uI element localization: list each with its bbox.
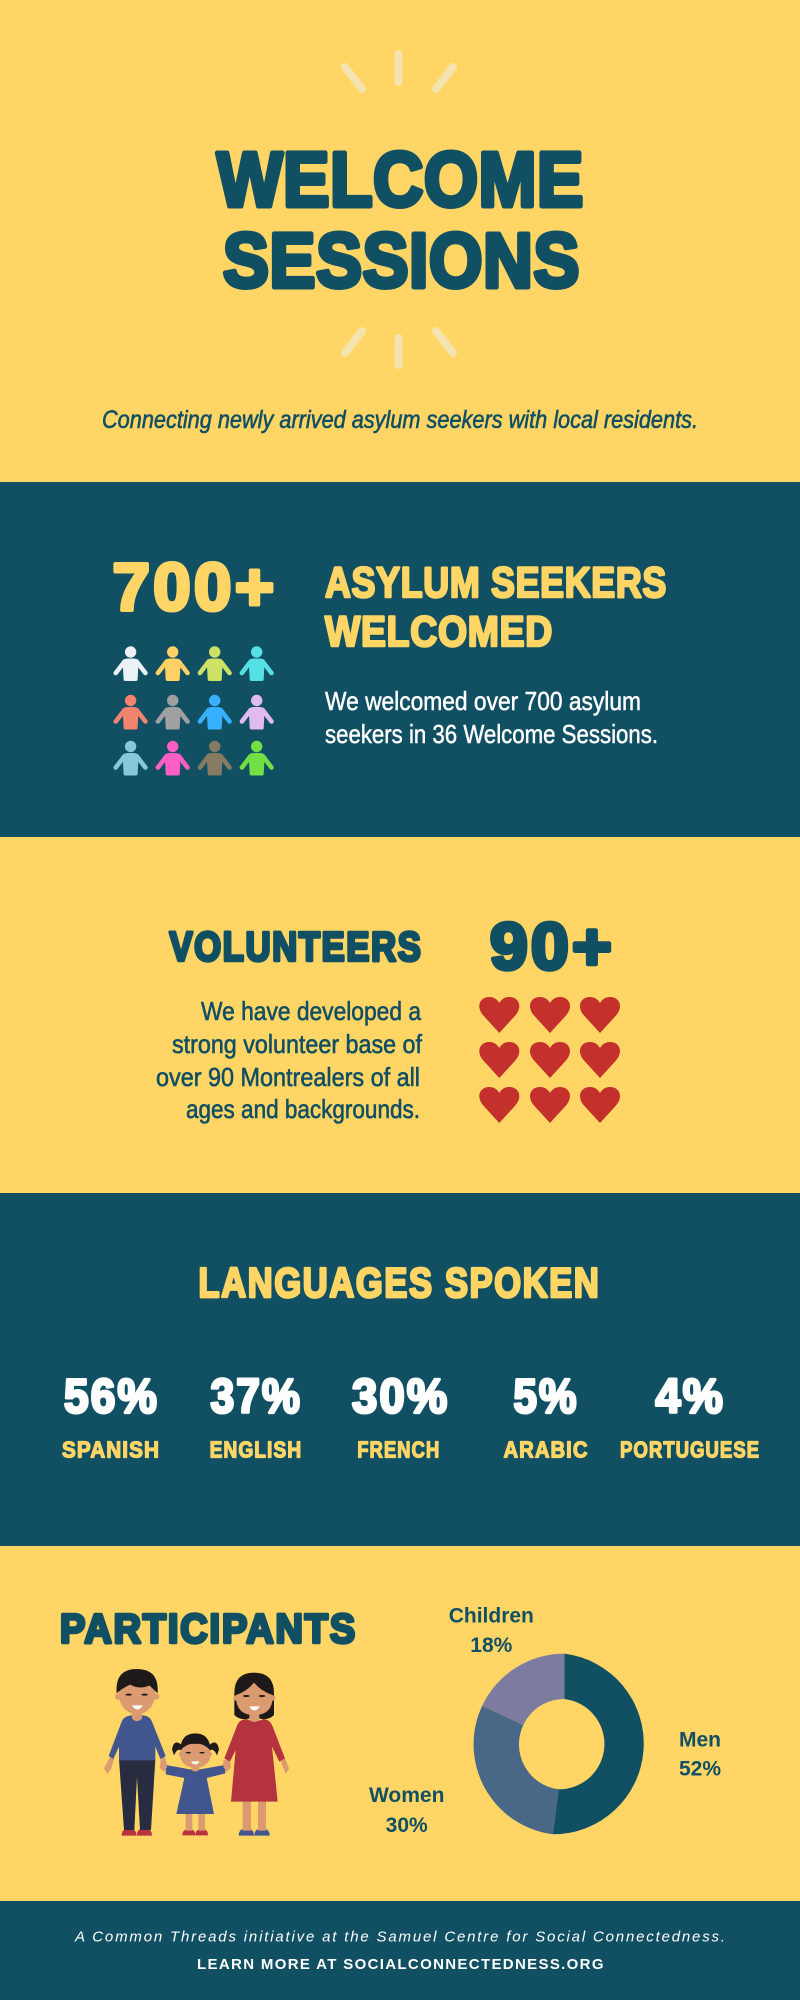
- title: [217, 137, 584, 304]
- stat: 700+: 700+: [112, 550, 278, 625]
- stat: Spanish: [62, 1370, 160, 1462]
- label: children 18%: 18%: [470, 1634, 513, 1657]
- stat: Portuguese: PORTUGUESE: [620, 1436, 760, 1462]
- text block: volunteers description: [156, 996, 423, 1124]
- figure: child: [160, 1733, 231, 1835]
- text block: volunteers description: over 90 Montrealers of all: [156, 1062, 420, 1092]
- segment: children 18%: [482, 1654, 564, 1725]
- stat: 90+: 90+: [490, 909, 615, 983]
- chart: participants donut: [474, 1654, 644, 1834]
- panel: volunteers: [0, 837, 800, 1193]
- stat: Portuguese: 4%: [656, 1370, 725, 1424]
- panel: header: [0, 0, 800, 482]
- stat: Portuguese: [620, 1370, 760, 1462]
- illustration: family holding hands: [104, 1669, 289, 1836]
- subtitle: Connecting newly arrived asylum seekers with local residents.: [102, 406, 698, 434]
- text: learn more link: LEARN MORE AT SOCIALCONNECTEDNESS.ORG: [197, 1956, 604, 1973]
- title: WELCOME: [217, 137, 584, 223]
- stat: Spanish: 56%: [64, 1370, 159, 1424]
- label: men 52%: 52%: [679, 1758, 721, 1780]
- stat: English: [210, 1370, 302, 1462]
- label: men 52%: [679, 1729, 721, 1780]
- text block: volunteers description: We have developed a: [201, 996, 421, 1026]
- stat: French: 30%: [352, 1370, 450, 1424]
- text: initiative credit: A Common Threads initiative at the Samuel Centre for Social Connectedness.: [74, 1928, 725, 1946]
- icon: top sunburst rays: [345, 54, 453, 89]
- segment: men 52%: [553, 1654, 644, 1834]
- heading: asylum seekers welcomed: WELCOMED: [325, 608, 553, 656]
- heading: participants: PARTICIPANTS: [60, 1606, 357, 1652]
- icon group: nine hearts: [479, 997, 620, 1123]
- label: women 30%: 30%: [386, 1814, 428, 1837]
- stat: Spanish: SPANISH: [62, 1436, 160, 1462]
- icon: bottom sunburst rays: [345, 331, 453, 365]
- stat: Arabic: 5%: [514, 1370, 578, 1424]
- panel: languages spoken: [0, 1193, 800, 1546]
- stat: French: [352, 1370, 450, 1462]
- heading: asylum seekers welcomed: [325, 559, 667, 656]
- label: children 18%: Children: [449, 1604, 534, 1627]
- text block: asylum seekers description: We welcomed over 700 asylum: [325, 686, 641, 716]
- panel: footer: [0, 1901, 800, 2000]
- title: SESSIONS: [223, 218, 580, 304]
- heading: volunteers: VOLUNTEERS: [170, 924, 422, 970]
- figure: woman: [223, 1673, 289, 1836]
- text block: volunteers description: ages and backgrounds.: [186, 1094, 420, 1124]
- stat: Arabic: [504, 1370, 588, 1462]
- stat: French: FRENCH: [357, 1436, 440, 1462]
- text block: asylum seekers description: [325, 686, 658, 749]
- text block: volunteers description: strong volunteer base of: [172, 1029, 423, 1059]
- stat: Arabic: ARABIC: [504, 1436, 588, 1462]
- stat: English: ENGLISH: [210, 1436, 302, 1462]
- figure: man: [104, 1669, 167, 1836]
- label: men 52%: Men: [679, 1729, 721, 1752]
- heading: asylum seekers welcomed: ASYLUM SEEKERS: [325, 559, 667, 607]
- label: women 30%: [369, 1784, 444, 1837]
- heading: languages spoken: LANGUAGES SPOKEN: [198, 1259, 600, 1306]
- text block: asylum seekers description: seekers in 36 Welcome Sessions.: [325, 719, 658, 749]
- stat: English: 37%: [210, 1370, 302, 1424]
- icon group: twelve people: [116, 646, 272, 776]
- panel: participants: [0, 1546, 800, 1901]
- panel: asylum seekers: [0, 482, 800, 837]
- label: women 30%: Women: [369, 1784, 444, 1807]
- label: children 18%: [449, 1604, 534, 1657]
- segment: women 30%: [474, 1706, 559, 1834]
